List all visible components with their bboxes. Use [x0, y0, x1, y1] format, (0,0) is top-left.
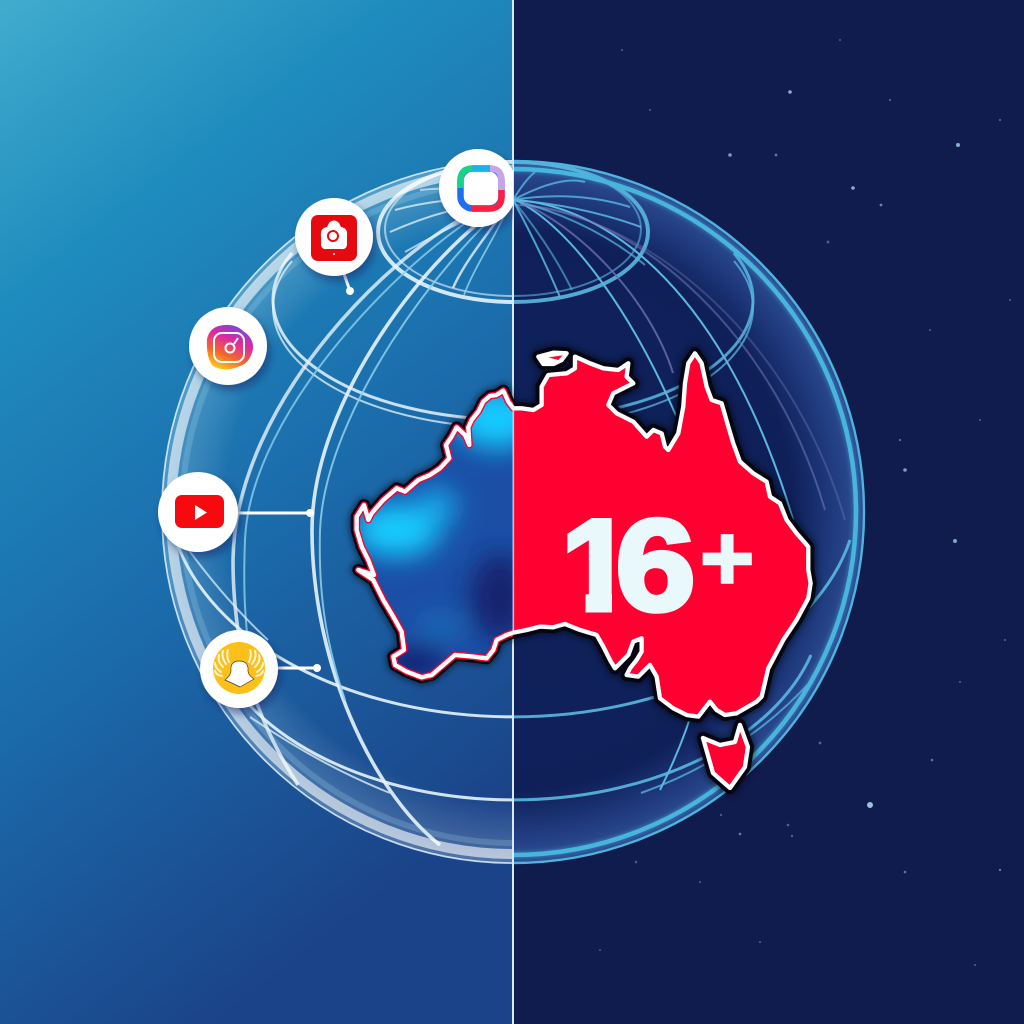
map soft shadow: [357, 353, 811, 788]
center divider line: [512, 0, 514, 1024]
digit 6: 6: [616, 492, 696, 638]
map dark outline: [357, 353, 811, 788]
globe right rim: [514, 160, 866, 864]
globe left rim: [162, 160, 512, 864]
globe left fill: [164, 164, 512, 862]
age label 16+: [558, 492, 754, 638]
star field: [599, 39, 1011, 966]
globe right fill: [514, 164, 863, 862]
icon: red app: [295, 198, 373, 276]
digit 1: 1: [561, 492, 633, 638]
globe left latitude lines: [176, 162, 850, 800]
plus sign: +: [700, 506, 754, 610]
globe left meridian lines: [185, 189, 513, 845]
globe right half: [514, 160, 866, 864]
Australia map: [340, 353, 811, 788]
divider over map: [512, 405, 514, 633]
map white coastline: [357, 353, 811, 788]
red inner coast edge: [353, 387, 514, 681]
icon: Snapchat style: [200, 630, 278, 708]
foot covers of digit 1: [558, 589, 634, 616]
connector lines: [236, 274, 354, 672]
left background panel: [0, 0, 513, 1024]
right background panel: [513, 0, 1024, 1024]
icon: colorful rounded square app: [439, 149, 517, 227]
Melville island red streak: [548, 355, 563, 360]
map red fill: [357, 353, 811, 788]
icon: YouTube: [158, 472, 238, 552]
western Australia blue fill: [353, 387, 514, 681]
globe right meridian lines: [513, 172, 845, 790]
globe right latitude lines: [176, 162, 850, 800]
globe left half: [162, 160, 512, 864]
icon: Instagram style: [189, 307, 267, 385]
